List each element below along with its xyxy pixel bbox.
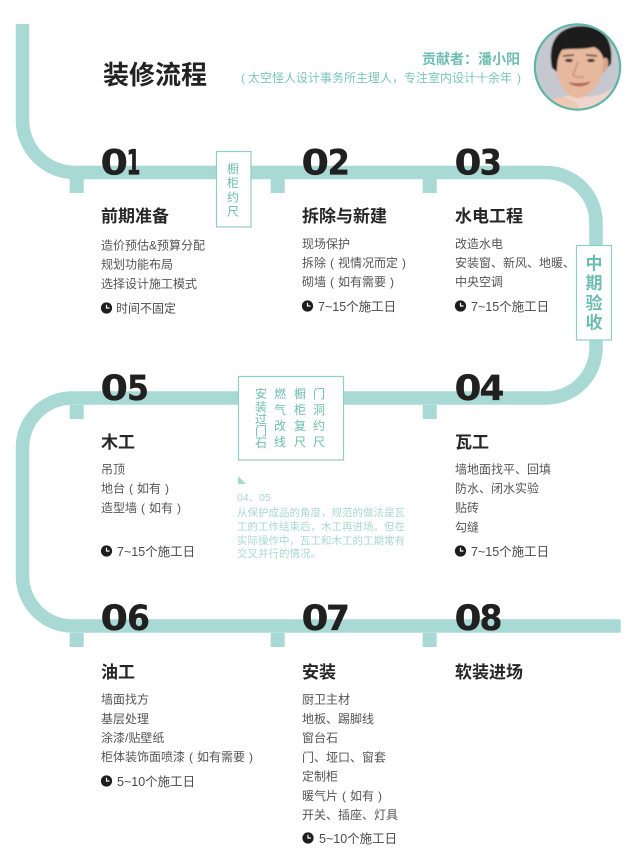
step number 07: 7	[326, 599, 350, 639]
panel: step 05: 造型墙 ( 如有 )	[101, 500, 181, 515]
callout: doors, gas, cabinets: 橱	[294, 387, 306, 401]
step number 07	[302, 599, 350, 639]
contributor name: 贡献者：潘小阳	[422, 51, 520, 67]
step number 08: 0	[454, 599, 482, 639]
panel: step 07: 暖气片 ( 如有 )	[302, 788, 382, 803]
callout: mid-term inspection: 中	[586, 254, 602, 274]
step number 05: 5	[127, 369, 149, 409]
step number 03: 0	[454, 144, 482, 184]
step number 01: 1	[126, 144, 140, 184]
panel: step 04: 防水、闭水实验	[455, 480, 539, 496]
step number 01	[100, 144, 140, 184]
callout: doors, gas, cabinets: 尺	[294, 435, 306, 449]
note: tiling and carpentry order: 交叉并行的情况。	[237, 547, 321, 560]
panel: step 04: 墙地面找平、回填	[455, 462, 551, 476]
panel: step 03	[455, 207, 575, 314]
note: tiling and carpentry order: 从保护成品的角度，规范的做法是瓦	[237, 506, 406, 519]
step number 08: 8	[480, 599, 502, 639]
panel: step 07: 门、垭口、窗套	[302, 750, 386, 764]
panel: step 07: 地板、踢脚线	[302, 711, 374, 726]
panel: step 05: 7~15个施工日	[117, 545, 195, 559]
panel: step 01: 前期准备	[101, 206, 169, 226]
panel: step 06: 基层处理	[101, 712, 149, 726]
callout: mid-term inspection: 期	[586, 274, 602, 293]
callout: doors, gas, cabinets: 气	[274, 402, 286, 417]
panel: step 02	[302, 206, 406, 314]
callout: doors, gas, cabinets	[238, 376, 344, 460]
step number 06	[100, 599, 150, 639]
callout: doors, gas, cabinets: 安	[255, 386, 267, 401]
panel: step 06	[101, 663, 253, 789]
panel: step 01: 规划功能布局	[101, 256, 173, 272]
panel: step 04: 7~15个施工日	[471, 545, 549, 559]
panel: step 02: 拆除与新建	[302, 206, 387, 226]
step number 04: 0	[454, 369, 482, 409]
panel: step 06: 5~10个施工日	[117, 775, 195, 789]
panel: step 07: 窗台石	[302, 730, 338, 745]
panel: step 03: 中央空调	[455, 274, 503, 289]
callout: cabinet measuring	[216, 152, 251, 227]
panel: step 03: 改造水电	[455, 237, 503, 251]
note: tiling and carpentry order: 工的工作结束后，木工再进场。但在	[237, 520, 405, 533]
callout: doors, gas, cabinets: 石	[255, 436, 267, 450]
panel: step 04: 贴砖	[455, 500, 479, 515]
panel: step 05: 地台 ( 如有 )	[101, 480, 169, 496]
panel: step 01	[101, 206, 205, 316]
callout: doors, gas, cabinets: 改	[274, 419, 286, 433]
note: tiling and carpentry order: 04、05	[237, 492, 271, 504]
callout: mid-term inspection: 收	[586, 314, 602, 332]
panel: step 01: 造价预估&预算分配	[101, 238, 205, 252]
callout: doors, gas, cabinets: 线	[274, 435, 286, 449]
title: 装修流程	[103, 60, 207, 90]
contributor description: 太空怪人设计事务所主理人，专注室内设计十余年	[248, 70, 512, 85]
note: tiling and carpentry order: 实际操作中，瓦工和木工的工期常有	[237, 534, 405, 547]
process timeline line	[22, 24, 621, 647]
step number 02	[302, 144, 350, 184]
step number 05	[100, 369, 149, 409]
panel: step 08: 软装进场	[455, 663, 523, 682]
callout: doors, gas, cabinets: 柜	[294, 403, 306, 417]
callout: doors, gas, cabinets: 燃	[274, 386, 286, 401]
panel: step 06: 墙面找方	[101, 692, 149, 706]
panel: step 05: 吊顶	[101, 462, 125, 476]
callout: doors, gas, cabinets: 约	[313, 418, 325, 433]
panel: step 01: 时间不固定	[116, 300, 176, 316]
step number 04: 4	[480, 369, 504, 409]
panel: step 02: 砌墙 ( 如有需要 )	[302, 274, 394, 289]
callout: doors, gas, cabinets: 复	[294, 419, 306, 433]
note: tiling and carpentry order	[237, 476, 406, 560]
panel: step 06: 涂漆/贴壁纸	[101, 730, 164, 745]
step number 06: 6	[127, 599, 150, 639]
callout: mid-term inspection: 验	[586, 293, 602, 313]
panel: step 07	[302, 663, 398, 846]
callout: cabinet measuring: 尺	[227, 204, 239, 218]
callout: cabinet measuring: 柜	[227, 176, 239, 190]
panel: step 03: 7~15个施工日	[471, 300, 549, 314]
step number 03: 3	[480, 144, 502, 184]
panel: step 01: 选择设计施工模式	[101, 277, 197, 291]
callout: cabinet measuring: 橱	[227, 162, 239, 176]
step number 07: 0	[302, 599, 328, 639]
contributor description: )	[517, 71, 521, 85]
panel: step 05: 木工	[101, 433, 135, 452]
step number 01: 0	[100, 144, 128, 184]
panel: step 04: 勾缝	[455, 520, 479, 534]
panel: step 06: 柜体装饰面喷漆 ( 如有需要 )	[101, 749, 253, 764]
panel: step 02: 现场保护	[302, 237, 350, 251]
callout: cabinet measuring: 约	[227, 190, 239, 204]
panel: step 07: 定制柜	[302, 768, 338, 784]
step number 04	[454, 369, 504, 409]
panel: step 07: 安装	[302, 663, 336, 682]
panel: step 07: 厨卫主材	[302, 692, 350, 706]
step number 08	[454, 599, 502, 639]
callout: doors, gas, cabinets: 装	[255, 400, 267, 414]
panel: step 06: 油工	[101, 663, 135, 682]
panel: step 03: 水电工程	[455, 207, 523, 226]
callout: doors, gas, cabinets: 尺	[313, 435, 325, 449]
callout: doors, gas, cabinets: 门	[313, 386, 325, 401]
panel: step 07: 开关、插座、灯具	[302, 807, 398, 822]
callout: mid-term inspection	[576, 246, 612, 340]
panel: step 05	[101, 433, 195, 559]
callout: doors, gas, cabinets: 洞	[313, 403, 325, 417]
panel: step 04: 瓦工	[455, 433, 489, 452]
step number 03	[454, 144, 502, 184]
panel: step 03: 安装窗、新风、地暖、	[455, 255, 575, 270]
callout: doors, gas, cabinets: 门	[255, 423, 267, 438]
step number 05: 0	[100, 369, 128, 409]
panel: step 04	[455, 433, 551, 559]
callout: doors, gas, cabinets: 过	[255, 412, 267, 426]
contributor description: (	[241, 71, 245, 85]
panel: step 02: 拆除 ( 视情况而定 )	[302, 255, 406, 270]
panel: step 07: 5~10个施工日	[319, 832, 397, 846]
step number 02: 2	[328, 144, 350, 184]
panel: step 02: 7~15个施工日	[318, 300, 396, 314]
step number 06: 0	[100, 599, 128, 639]
portrait photo	[532, 22, 624, 114]
step number 02: 0	[302, 144, 329, 184]
